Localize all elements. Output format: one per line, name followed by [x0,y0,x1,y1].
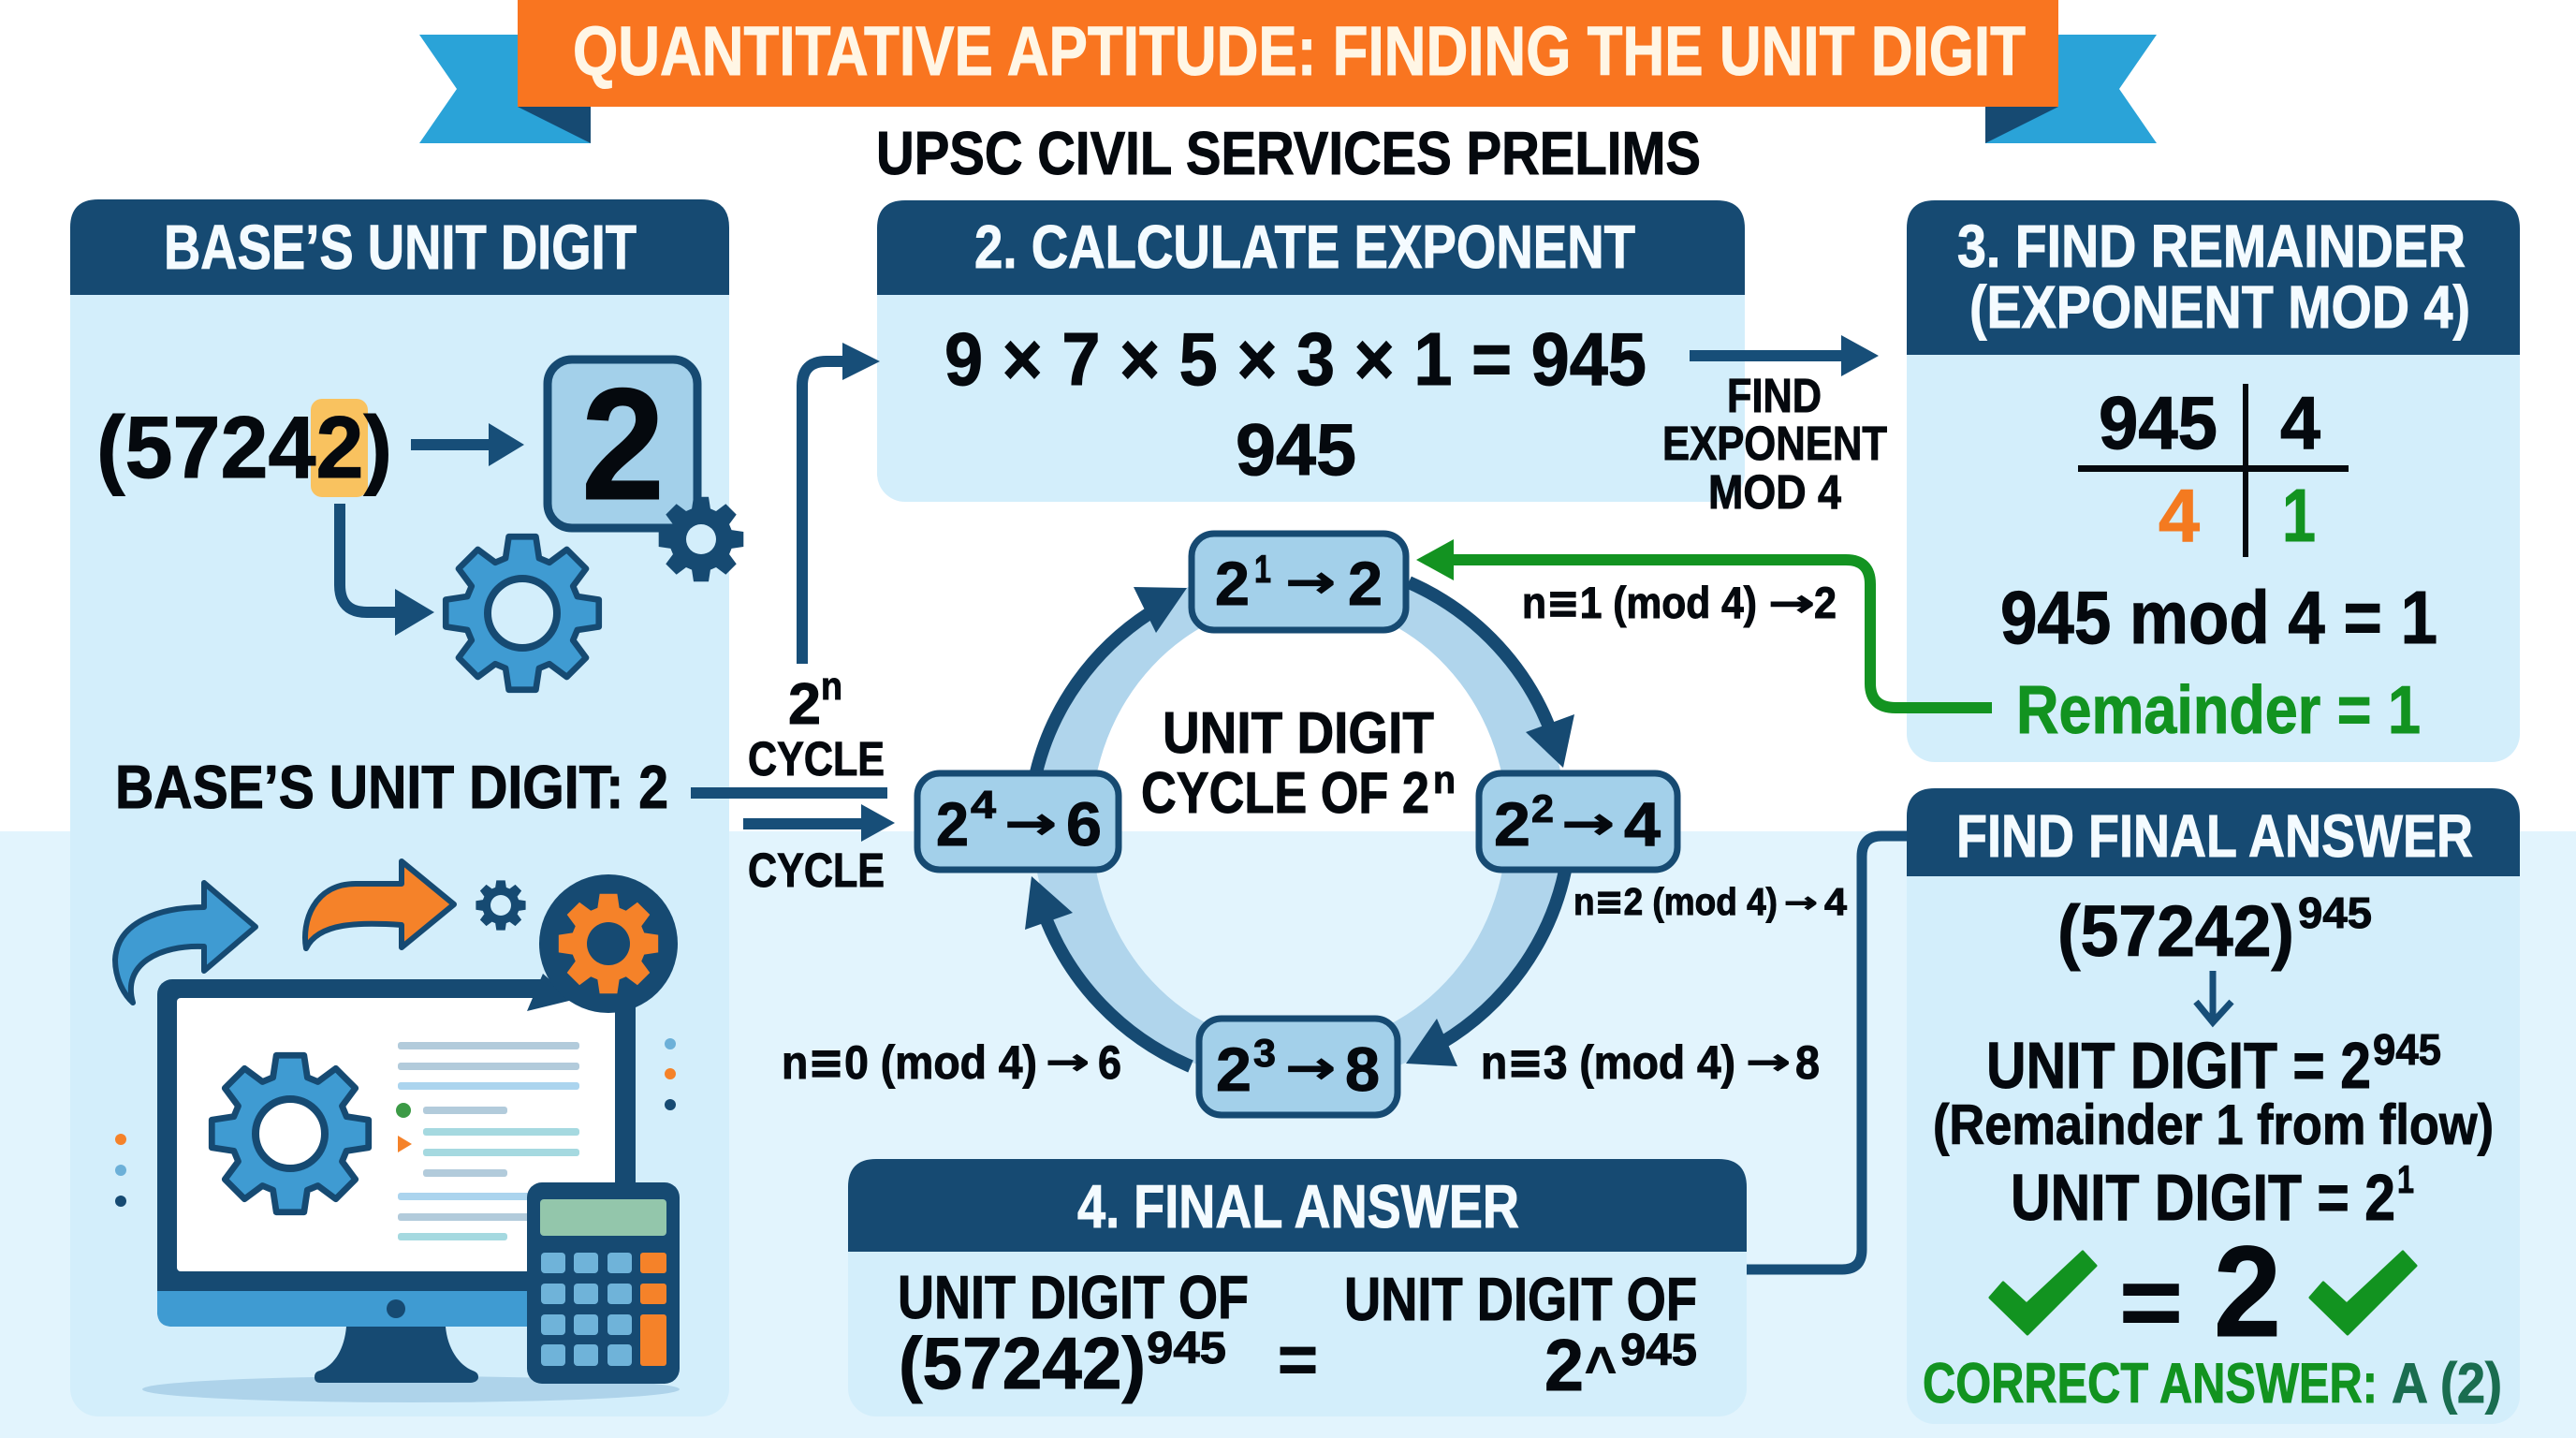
correct answer: A (2) [2392,1352,2502,1415]
curved orange arrow [305,861,454,948]
label: n mod 3: n≡3 (mod 4) [1481,1035,1735,1090]
node: 2^1: 2 [1348,549,1383,618]
node: 2^1: → [1285,556,1336,609]
node: 2^4: 6 [1066,789,1102,858]
arrow: final answer connector [1747,836,1910,1269]
equals sign: = [1278,1323,1318,1398]
title banner [419,0,2157,143]
label: 2n cycle: 2 [788,672,821,737]
cycle arrow: 6 to 2 [1036,587,1187,772]
icon: left check [1990,1252,2096,1334]
curved blue arrow [115,883,256,1003]
subtitle: UPSC CIVIL SERVICES PRELIMS [876,119,1701,187]
label: find exponent mod 4: EXPONENT [1662,417,1887,470]
unit digit power: UNIT DIGIT = 2 [1986,1029,2371,1102]
unit digit reduced: 1 [2397,1157,2414,1201]
panel: calculate exponent [877,200,1745,502]
digit box [548,356,697,534]
node: 2^3 [1199,1019,1398,1115]
right expression: 2 [1544,1324,1584,1406]
small gear [476,880,526,931]
cycle arrow: 2 to 4 [1409,582,1574,768]
panel: base's unit digit [70,199,743,1416]
left expression: 945 [1147,1324,1226,1373]
heading: find remainder [1957,213,2470,341]
decorative dots [115,1038,676,1207]
label: n mod 2: → [1784,887,1818,919]
unit digit reduced: UNIT DIGIT = 2 [2011,1161,2395,1234]
division layout: 1 [2282,474,2316,557]
heading: find final answer: FIND FINAL ANSWER [1956,802,2473,870]
gear on screen [212,1055,369,1212]
label: 2n cycle [748,664,885,785]
division layout: 4 [2159,474,2200,557]
panel: find remainder [1907,200,2520,762]
screen text lines [396,1042,579,1240]
label: find exponent mod 4 [1662,369,1887,519]
arrow: number to digit [411,423,524,466]
label: 2n cycle: CYCLE [748,732,885,785]
division layout [2078,381,2349,557]
cycle arrow: 8 to 6 [1025,876,1191,1066]
right expression: ^ [1585,1336,1617,1401]
heading: calculate exponent: 2. CALCULATE EXPONENT [974,213,1635,281]
mod equation: 945 mod 4 = 1 [2000,576,2437,659]
node: 2^1: 1 [1254,547,1271,591]
exponent product: 9 × 7 × 5 × 3 × 1 = 945 [944,317,1647,401]
arrow: base digit to cycle [691,787,895,842]
answer digit: 2 [2214,1220,2281,1364]
label: n mod 3: 8 [1795,1036,1820,1089]
panel: find final answer [1907,788,2520,1424]
center label: n [1433,757,1456,801]
center label [1141,701,1456,826]
label: n mod 0: n≡0 (mod 4) [782,1035,1037,1090]
heading: final answer: 4. FINAL ANSWER [1077,1172,1519,1240]
label: n mod 3: → [1746,1041,1791,1082]
calculator [527,1182,680,1384]
power expression: 945 [2298,888,2372,937]
ring [1032,564,1566,1084]
label: n mod 2: 4 [1824,880,1847,923]
left expression: (57242) [899,1322,1146,1404]
shadow and stand [142,1327,680,1402]
remainder note: (Remainder 1 from flow) [1933,1093,2494,1156]
highlight on last digit [311,399,368,497]
node: 2^2: 4 [1624,789,1661,858]
monitor [157,979,636,1327]
center label: CYCLE OF 2 [1141,761,1429,826]
label: n mod 2: n≡2 (mod 4) [1573,879,1778,924]
node: 2^3: 2 [1216,1034,1251,1104]
node: 2^2: → [1561,798,1615,850]
node: 2^2 [1479,773,1677,870]
node: 2^1 [1192,534,1406,630]
node: 2^2: 2 [1531,786,1554,830]
power expression: (57242) [2057,891,2294,972]
node: 2^4: 4 [971,783,997,827]
node: 2^4: → [1004,798,1057,850]
heading: find remainder: (EXPONENT MOD 4) [1969,273,2470,341]
node: 2^3: → [1285,1042,1336,1094]
number 57242: (57242) [96,398,392,496]
label: n mod 0: → [1046,1041,1090,1082]
digit box: 2 [581,356,665,534]
arrow: exponent to remainder [1690,335,1879,376]
label: 2n cycle: n [821,664,842,708]
icon: right check [2310,1252,2416,1334]
label: find exponent mod 4: FIND [1727,369,1822,422]
label: find exponent mod 4: MOD 4 [1708,465,1842,519]
speech bubble gear [527,874,678,1013]
title banner: QUANTITATIVE APTITUDE: FINDING THE UNIT DIGIT [573,12,2026,90]
label: n mod 1: n≡1 (mod 4) [1522,578,1757,629]
node: 2^2: 2 [1494,789,1530,858]
exponent value: 945 [1236,408,1356,491]
arrow: down [2196,971,2232,1022]
right expression: 945 [1620,1326,1697,1375]
label: n mod 1: → [1768,582,1815,625]
correct answer: CORRECT ANSWER: [1923,1352,2378,1415]
node: 2^3: 8 [1345,1034,1380,1104]
right expression: UNIT DIGIT OF [1344,1265,1697,1333]
base's unit digit result: BASE’S UNIT DIGIT: 2 [115,753,668,821]
answer equals: = [2119,1245,2183,1358]
left expression: UNIT DIGIT OF [898,1263,1249,1331]
icon: small gear [659,497,743,581]
heading: find remainder: 3. FIND REMAINDER [1957,213,2466,280]
node: 2^4: 2 [936,789,969,858]
unit digit power: 945 [2373,1025,2441,1074]
label: n mod 0: 6 [1098,1036,1121,1089]
panel: final answer [848,1159,1747,1416]
remainder result: Remainder = 1 [2016,673,2421,748]
label: cycle: CYCLE [748,844,885,897]
division layout: 4 [2280,381,2320,464]
label: n mod 1: 2 [1814,578,1837,627]
arrow: remainder to cycle [1416,539,1992,708]
division layout: 945 [2099,381,2217,464]
node: 2^1: 2 [1215,549,1250,618]
heading: base's unit digit: BASE’S UNIT DIGIT [164,213,637,283]
node: 2^4 [917,773,1119,870]
center label: UNIT DIGIT [1163,701,1434,766]
icon: large gear [446,536,599,690]
arrow: up to exponent [802,343,880,664]
cycle arrow: 4 to 8 [1406,871,1565,1066]
illustration: monitor with calculator [115,861,680,1402]
node: 2^3: 3 [1253,1031,1276,1075]
arrow: digit to gear [340,504,434,636]
right expression [1344,1265,1697,1406]
left expression [898,1263,1249,1404]
chart: unit digit cycle [917,534,1677,1115]
